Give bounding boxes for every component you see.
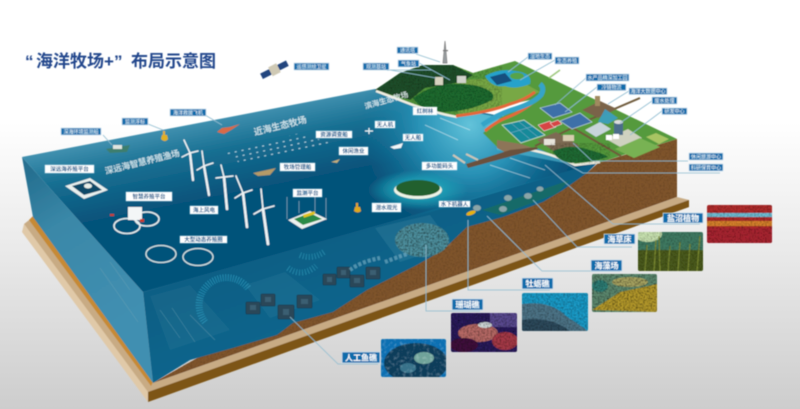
hill: coastal mountain (375, 65, 473, 100)
artificial reef cubes (246, 267, 380, 319)
leader lines (103, 54, 720, 364)
label: drone (375, 120, 395, 128)
title: 布局示意图 (131, 51, 216, 71)
label: seaweed field (591, 260, 622, 271)
label: comms tower: 通讯塔 (400, 47, 415, 54)
photo: oyster reef (522, 293, 588, 331)
title: 海洋牧场+ (36, 51, 114, 71)
large cages (146, 246, 213, 266)
title: “ (25, 52, 34, 71)
label: cold chain (597, 84, 626, 91)
label: buoy (122, 118, 148, 126)
label: cold chain: 冷链物流 (601, 84, 622, 91)
label: buoy: 监测浮标 (125, 118, 145, 126)
label: observation station: 观测基站 (366, 64, 386, 70)
lake (485, 70, 530, 88)
label: waste water (652, 97, 677, 104)
label: ship: 深海环境监测船 (63, 128, 99, 136)
pier (453, 147, 538, 168)
label: offshore wind: 海上风电 (193, 206, 215, 214)
icon: underwater robot (466, 209, 476, 217)
label: wetland (528, 53, 552, 60)
brown lots (497, 140, 533, 155)
label: dock: 多功能码头 (426, 162, 454, 170)
label: mangrove (413, 107, 437, 115)
text: deep-sea smart aquaculture: 深远海智慧养殖渔场 (104, 148, 181, 176)
label: research center: 研发中心 (664, 108, 685, 115)
fish cage grid (224, 133, 330, 163)
label: satellite (294, 63, 329, 70)
label: large cages: 大型动态养殖圈 (184, 236, 223, 244)
icon: helicopter (217, 124, 240, 134)
label: deep sea platform (45, 165, 94, 173)
label: salt marsh plants: 盐沼植物 (667, 213, 699, 223)
label: eco farming: 生态养殖 (557, 58, 577, 64)
icon: buoy near island (354, 203, 361, 212)
monitoring platform (287, 195, 327, 229)
fish school upper (288, 252, 324, 273)
icon: observation buildings (435, 76, 466, 85)
label: underwater robot (439, 200, 470, 208)
label: deep sea platform: 深远海养殖平台 (50, 165, 89, 173)
photo: seagrass bed (637, 231, 704, 272)
label: seagrass bed: 海草床 (608, 234, 632, 244)
icon: drone (365, 128, 373, 134)
label: artificial reef (342, 352, 380, 363)
label: mangrove: 红树林 (417, 107, 434, 115)
label: leisure fishing: 休闲渔业 (342, 147, 365, 155)
label: management vessel: 牧场管理船 (284, 163, 312, 171)
data center and research campus (585, 122, 611, 137)
label: oyster reef (522, 278, 553, 289)
label: observation station (363, 63, 389, 70)
text: near-sea ecological ranch: 近海生态牧场 (253, 114, 308, 137)
smart aquaculture platform (110, 207, 159, 234)
text: coastal ecological ranch: 滨海生态牧场 (363, 89, 410, 111)
label: big data center: 海洋大数据中心 (630, 88, 666, 95)
label: conservation center: 科研保育中心 (691, 164, 721, 172)
hill: front forest (413, 84, 493, 112)
soil cross-section (150, 135, 680, 385)
solar arrays (540, 103, 572, 118)
underwater section (143, 160, 600, 383)
label: research center (662, 108, 687, 115)
title: ” (114, 52, 122, 71)
label: waste water: 废水处理 (654, 98, 675, 104)
label: comms tower (397, 47, 418, 54)
label: offshore wind (190, 206, 218, 214)
label: smart platform: 智慧养殖平台 (132, 192, 166, 200)
photo: seaweed field (592, 274, 657, 312)
icon: satellite (259, 59, 290, 81)
fish ponds (502, 120, 545, 143)
label: unmanned boat (403, 134, 423, 142)
icon: survey ship (106, 145, 130, 153)
crop fields (615, 138, 660, 158)
label: wetland: 湿地生态 (530, 53, 550, 60)
red mangrove coast (456, 92, 540, 131)
label: helicopter (170, 109, 206, 116)
coral reef (395, 223, 449, 257)
section titles on water (104, 89, 410, 176)
icon: monitoring buoy (161, 131, 168, 141)
meadow (455, 78, 540, 116)
sandy beach (376, 91, 600, 165)
label: seafood processing: 水产品精深加工园 (587, 74, 628, 82)
label: underwater robot: 水下机器人 (441, 200, 469, 208)
icon: white boat (390, 143, 403, 149)
label: satellite: 遥感测绘卫星 (296, 64, 327, 70)
factories (538, 121, 556, 131)
label: unmanned boat: 无人船 (405, 134, 422, 142)
deep sea platform (65, 178, 108, 199)
ocean surface (22, 89, 600, 292)
water left side face (22, 157, 153, 383)
label: weather station: 气象站 (401, 60, 416, 68)
photo: artificial reef (381, 339, 448, 383)
label: seaweed field: 海藻场 (594, 260, 618, 270)
label: drone: 无人机 (377, 120, 394, 128)
label: dive tourism: 潜水观光 (375, 204, 398, 212)
label: helicopter: 海洋救援飞机 (173, 110, 203, 116)
label: artificial reef: 人工鱼礁 (345, 352, 377, 362)
island (368, 170, 468, 210)
label: smart platform (126, 192, 172, 201)
label: dock (422, 162, 457, 170)
label: seagrass bed (604, 234, 635, 244)
label: oyster reef: 牡蛎礁 (526, 278, 550, 288)
label: monitoring platform: 监测平台 (296, 189, 319, 197)
seaweed and small reef ripples (350, 254, 407, 270)
label: weather station (398, 60, 419, 68)
label: survey vessel (316, 130, 352, 138)
land (372, 60, 677, 165)
label: management vessel (280, 163, 315, 171)
base plate (22, 197, 689, 402)
roads (535, 98, 640, 156)
forest strip (553, 147, 608, 163)
label: coral reef (452, 299, 483, 310)
label: coral reef: 珊瑚礁 (456, 300, 480, 310)
photo: salt marsh (707, 205, 772, 243)
label: leisure center: 休闲旅游中心 (691, 154, 721, 160)
fish school swirl (199, 278, 248, 322)
oyster beds (473, 180, 570, 215)
label: survey vessel: 资源调查船 (320, 130, 348, 138)
label: monitoring platform (293, 189, 322, 197)
icon: radio tower (443, 41, 448, 63)
icon: fishing vessels (253, 159, 340, 176)
streaks on water side (100, 262, 215, 342)
wind turbines (182, 140, 274, 244)
label: leisure fishing (339, 147, 368, 155)
label: large cages (180, 236, 227, 244)
label: dive tourism (372, 203, 401, 212)
river (482, 84, 543, 125)
label: eco farming (555, 57, 579, 64)
photo: coral reef (450, 313, 518, 352)
